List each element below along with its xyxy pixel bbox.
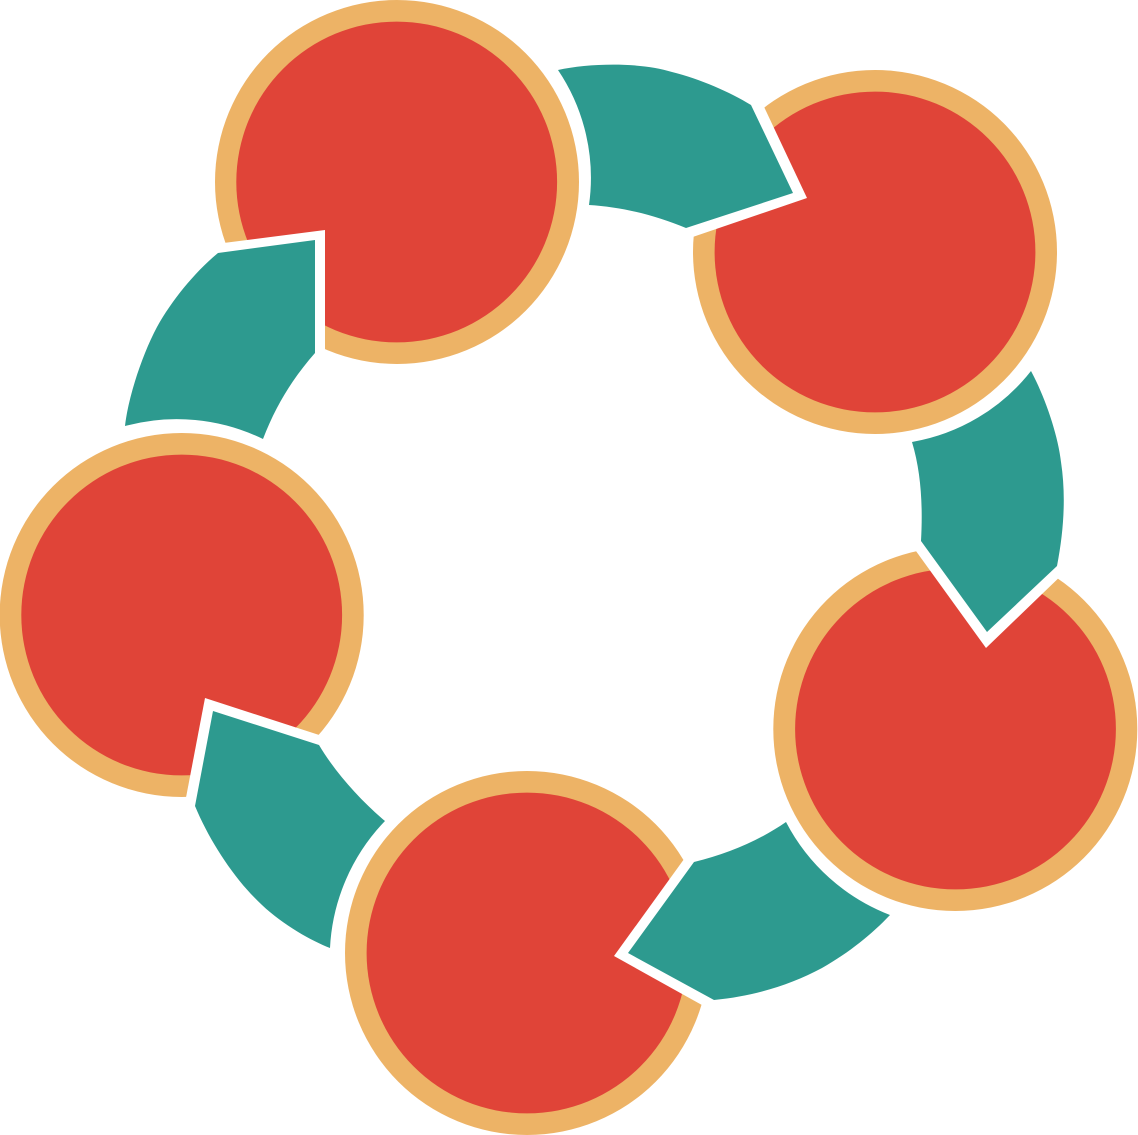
arrow segment: upper right to lower right: [912, 371, 1064, 632]
circle 2: upper right: [640, 58, 1057, 434]
circle 1: top: [200, 0, 579, 380]
arrow segment: lower right to bottom: [628, 822, 890, 1000]
circle 5: left: [0, 433, 364, 850]
arrow segment: left to top: [125, 240, 315, 439]
circle 4: bottom: [345, 771, 780, 1135]
arrow segment: top to upper right: [558, 65, 793, 228]
circle 3: lower right: [773, 522, 1137, 911]
arrow segment: bottom to left: [195, 711, 385, 948]
